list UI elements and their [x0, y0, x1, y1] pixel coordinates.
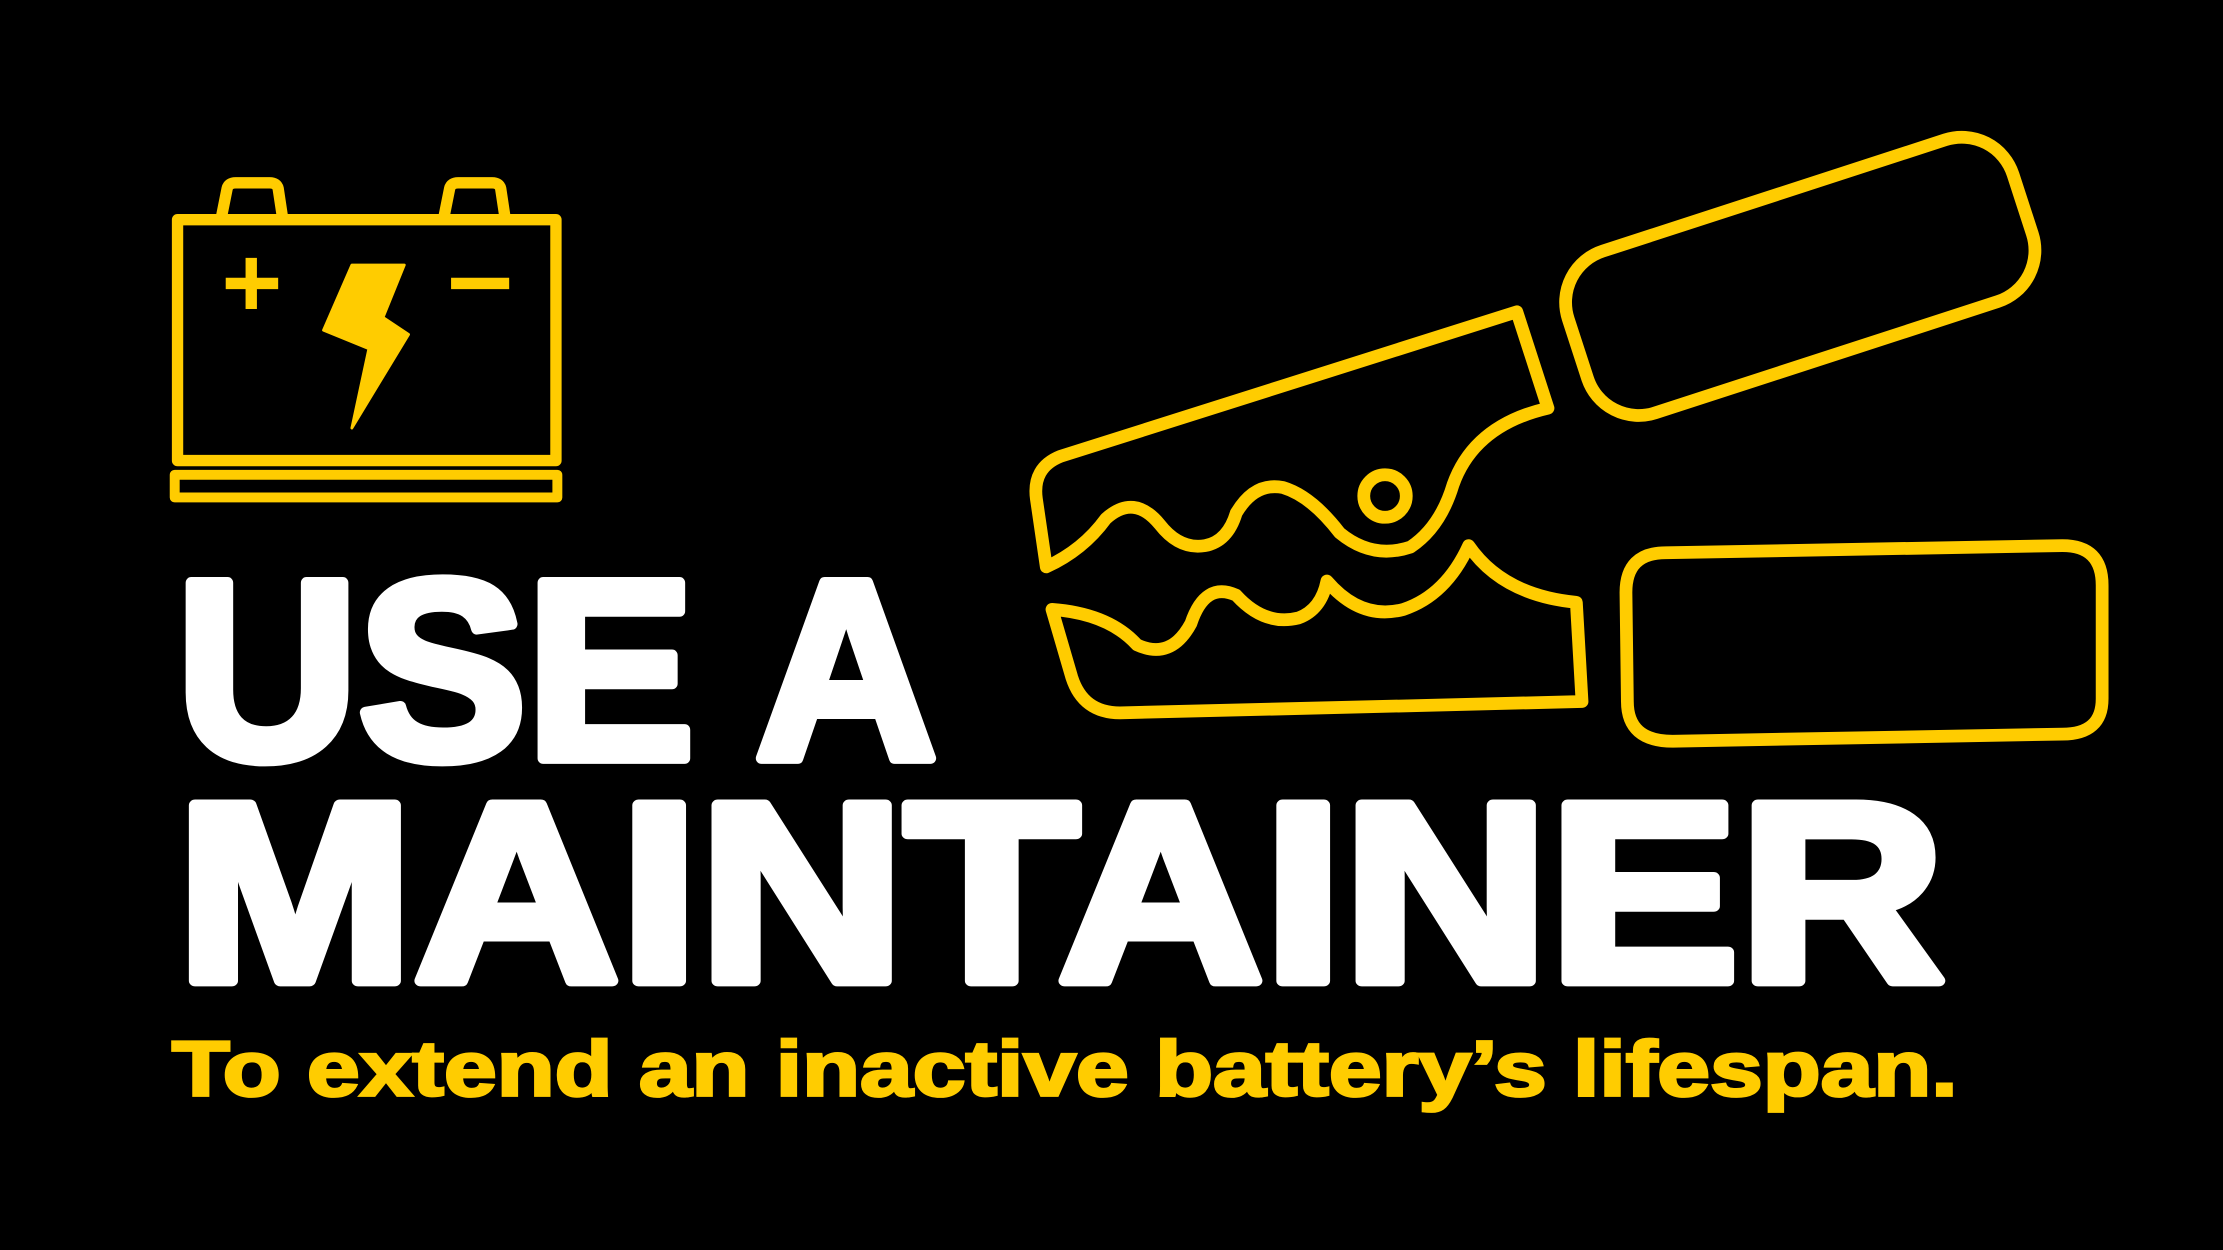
subtitle: To extend an inactive battery’s lifespan.: [172, 1025, 1958, 1113]
title: [176, 528, 1945, 1036]
title: USE A: [176, 528, 937, 813]
illustration: battery clamp: [1036, 123, 2102, 741]
title: MAINTAINER: [176, 751, 1945, 1036]
icon: car battery: [175, 183, 557, 497]
